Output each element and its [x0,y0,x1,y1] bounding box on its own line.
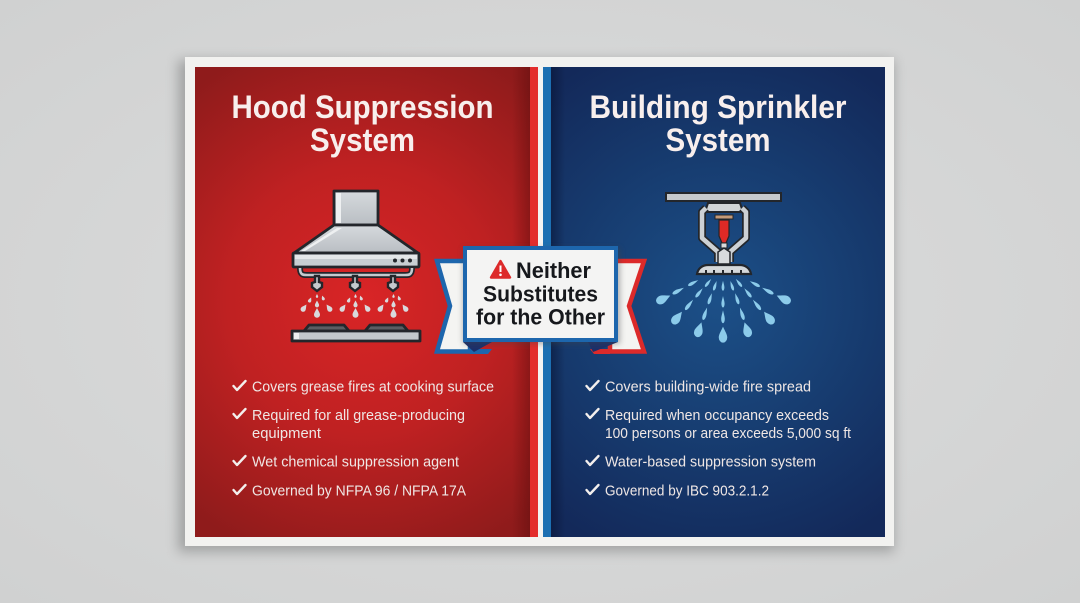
list: sprinkler facts [586,378,852,500]
label box: Substitutes [483,282,598,306]
panel: building sprinkler [551,67,885,537]
list: hood facts: Required for all grease-producing [252,407,465,424]
heading: hood suppression [232,89,494,158]
heading: hood suppression: System [310,122,415,158]
heading: building sprinkler: System [666,122,770,158]
center divider stripes [530,67,551,537]
icon: range hood [292,191,420,341]
list: hood facts [234,378,494,500]
label box [465,248,616,340]
list: hood facts: equipment [252,425,322,442]
label box: Neither [516,258,591,283]
list: hood facts: Governed by NFPA 96 / NFPA 17A [252,482,466,500]
list: sprinkler facts: 100 persons or area exceeds 5,000 sq ft [605,425,852,442]
banner: neither substitutes [437,248,644,354]
right ribbon [588,261,644,354]
spray drops [300,294,409,318]
panel: hood suppression [195,67,530,537]
heading: building sprinkler: Building Sprinkler [590,89,846,125]
label box: for the Other [476,304,605,330]
list: sprinkler facts: Water-based suppression system [605,454,816,470]
list: sprinkler facts: Governed by IBC 903.2.1.2 [605,482,769,500]
heading: building sprinkler [590,89,846,158]
left ribbon [437,261,492,354]
poster card [185,57,894,546]
list: sprinkler facts: Covers building-wide fire spread [605,378,811,396]
icon: sprinkler head [655,193,792,343]
icon: warning triangle [491,261,510,278]
list: hood facts: Wet chemical suppression agent [252,454,460,470]
water spray [655,278,792,343]
list: sprinkler facts: Required when occupancy exceeds [605,407,829,424]
list: hood facts: Covers grease fires at cooking surface [252,378,494,396]
heading: hood suppression: Hood Suppression [232,89,494,125]
